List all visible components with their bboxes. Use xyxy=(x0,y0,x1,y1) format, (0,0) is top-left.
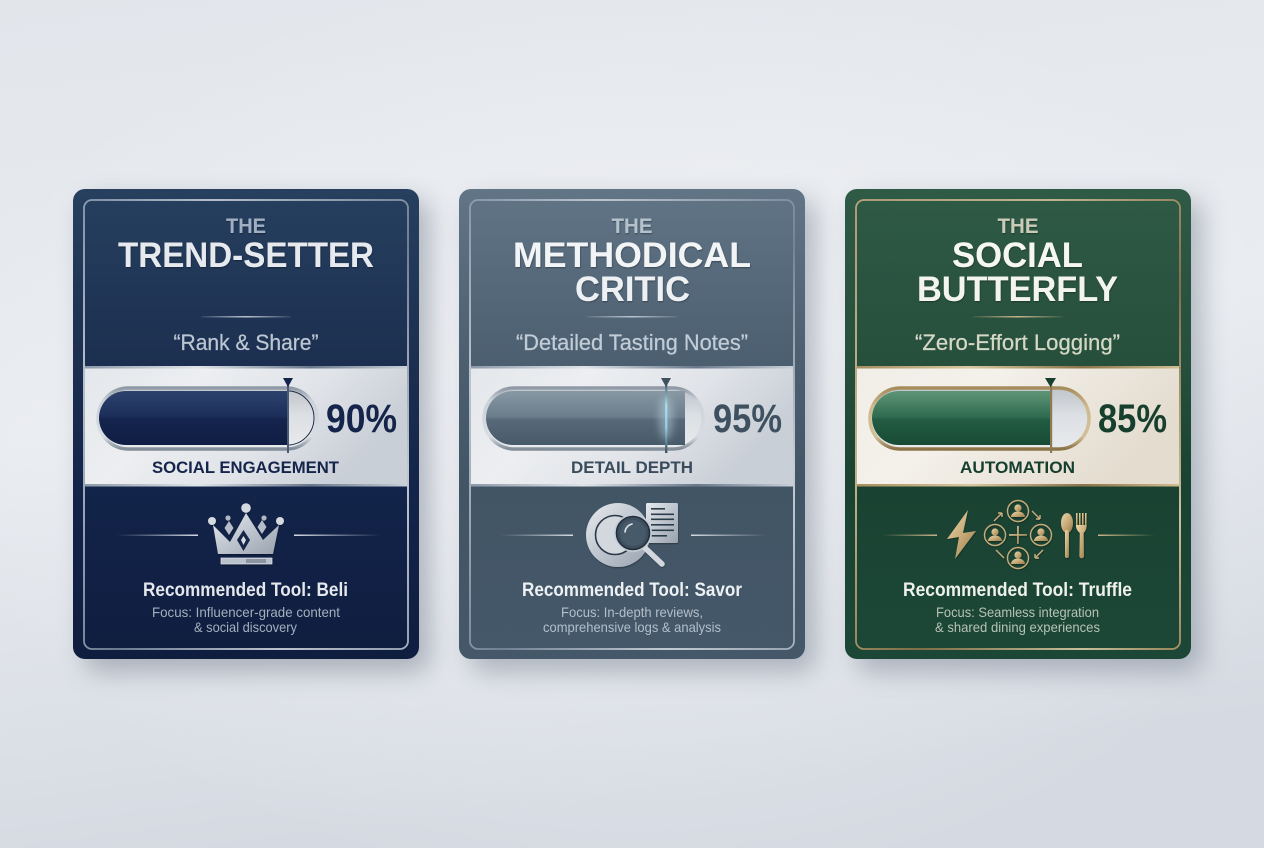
focus text: Focus: Seamless integration xyxy=(936,604,1099,620)
focus text: & social discovery xyxy=(194,619,297,635)
heading: the methodical critic: METHODICAL xyxy=(513,236,751,275)
tagline: “Rank & Share” xyxy=(174,330,318,355)
value: 85%: 85% xyxy=(1098,397,1167,441)
progress bar: 90 percent xyxy=(98,378,317,453)
metric band xyxy=(85,366,407,486)
heading: the trend-setter xyxy=(118,215,374,275)
progress bar: 95 percent xyxy=(484,378,703,453)
icon: crown xyxy=(208,503,284,564)
value: 90%: 90% xyxy=(326,397,397,441)
tagline: “Zero-Effort Logging” xyxy=(915,330,1120,355)
focus text xyxy=(935,604,1100,635)
focus text: & shared dining experiences xyxy=(935,619,1100,635)
focus text: Focus: In-depth reviews, xyxy=(561,604,703,620)
heading: the social butterfly: BUTTERFLY xyxy=(917,270,1118,309)
heading: the trend-setter: TREND-SETTER xyxy=(118,236,374,275)
focus text: Focus: Influencer-grade content xyxy=(152,604,340,620)
progress bar: 85 percent xyxy=(870,378,1089,453)
recommended tool: Recommended Tool: Savor xyxy=(522,580,743,601)
panel: the methodical critic xyxy=(459,189,816,672)
heading: the social butterfly: THE xyxy=(998,215,1038,238)
icon: lightning, people and cutlery xyxy=(947,500,1087,568)
metric label: AUTOMATION xyxy=(960,458,1075,477)
metric label: DETAIL DEPTH xyxy=(571,458,693,477)
recommended tool: Recommended Tool: Truffle xyxy=(903,580,1132,601)
focus text xyxy=(152,604,340,635)
recommended tool: Recommended Tool: Beli xyxy=(143,580,348,601)
metric band xyxy=(857,366,1179,486)
panel: the trend-setter xyxy=(73,189,430,672)
metric label: SOCIAL ENGAGEMENT xyxy=(152,458,340,477)
heading: the trend-setter: THE xyxy=(226,215,266,238)
heading: the methodical critic xyxy=(513,215,751,309)
heading: the methodical critic: THE xyxy=(612,215,652,238)
value: 95%: 95% xyxy=(713,397,782,441)
panel: the social butterfly xyxy=(845,189,1202,672)
tagline: “Detailed Tasting Notes” xyxy=(516,330,748,355)
heading: the social butterfly: SOCIAL xyxy=(952,236,1083,275)
focus text xyxy=(543,604,721,635)
heading: the methodical critic: CRITIC xyxy=(575,270,690,309)
metric band xyxy=(471,366,793,486)
focus text: comprehensive logs & analysis xyxy=(543,619,721,635)
heading: the social butterfly xyxy=(917,215,1118,309)
icon: plate, magnifier and notes xyxy=(586,503,678,567)
